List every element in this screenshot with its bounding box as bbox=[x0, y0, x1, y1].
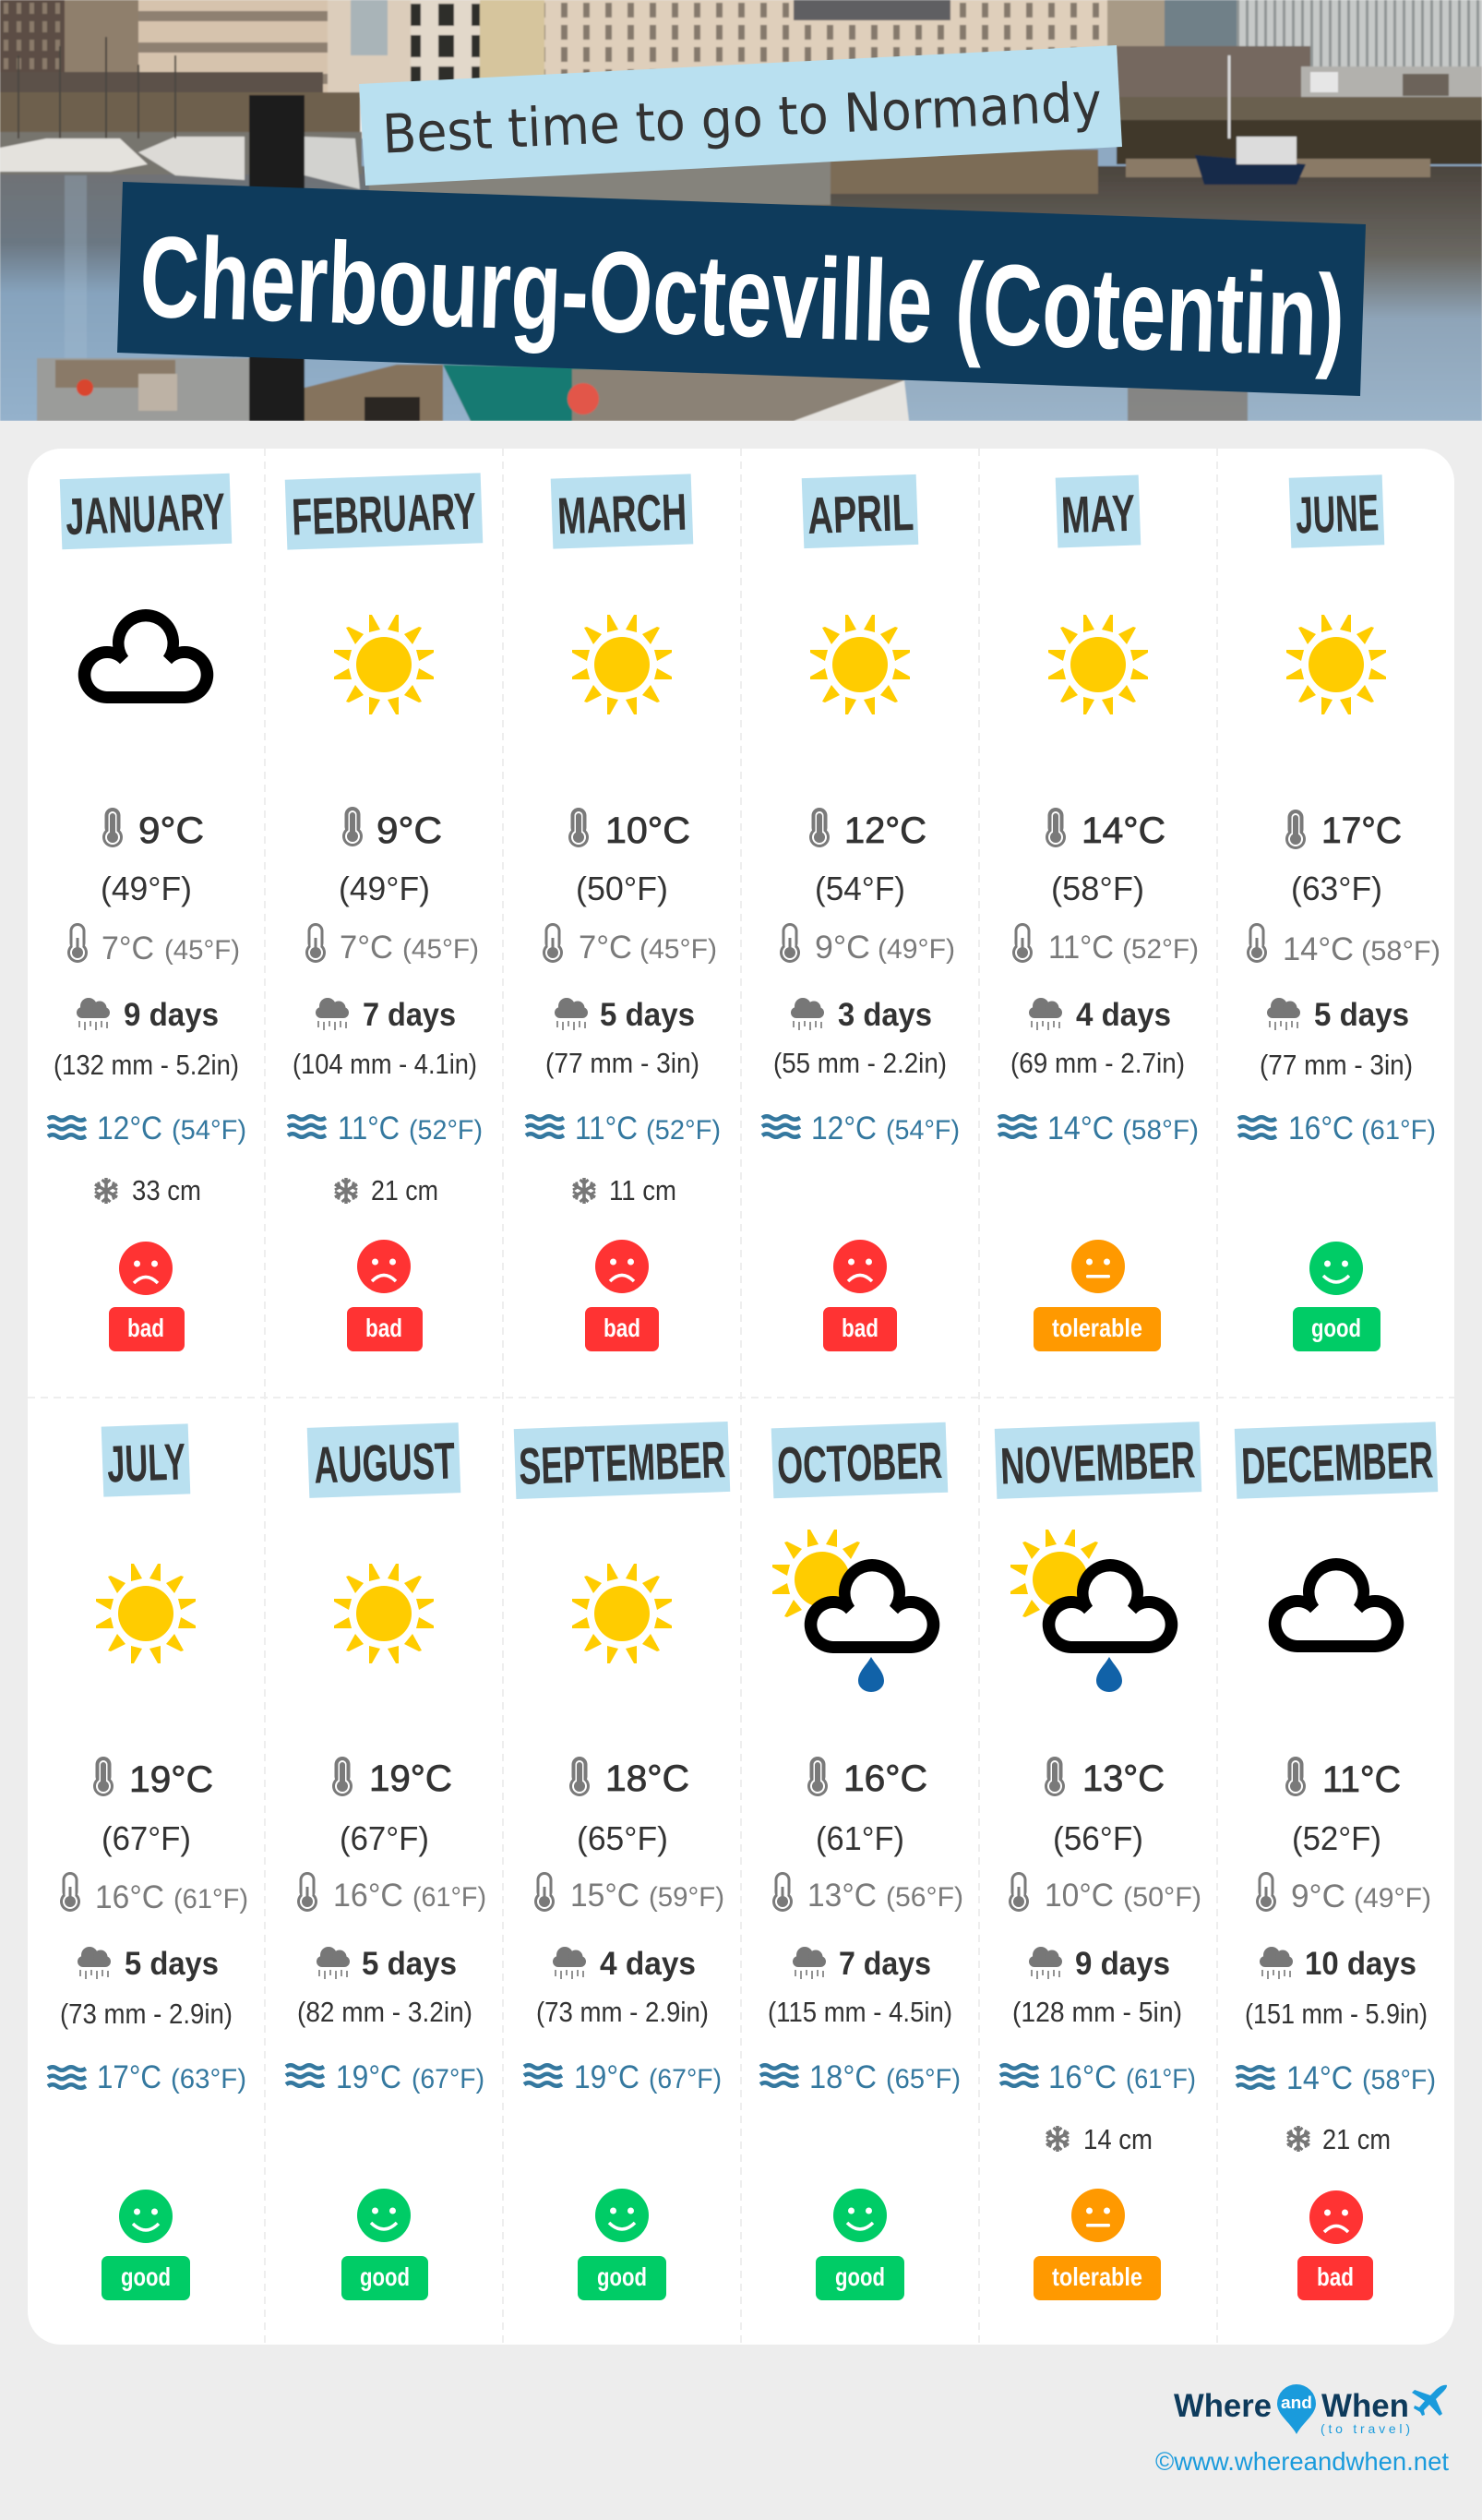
month label: JULY bbox=[106, 1433, 186, 1493]
month: January bbox=[48, 474, 246, 1351]
logo: Where and When (to travel): When bbox=[1321, 2388, 1409, 2424]
icon: cloud bbox=[78, 609, 213, 703]
rating badge bbox=[102, 2256, 190, 2300]
sea temperature C: 12°C bbox=[97, 1110, 162, 1146]
icon: thermometer low bbox=[67, 923, 88, 963]
sea temperature F: (58°F) bbox=[1122, 1115, 1199, 1146]
icon: sun bbox=[1048, 615, 1148, 714]
rainfall: (55 mm - 2.2in) bbox=[773, 1047, 947, 1079]
icon: sea waves bbox=[48, 1117, 86, 1138]
low temperature C: 16°C bbox=[95, 1879, 164, 1915]
month: February bbox=[285, 473, 483, 1351]
icon: sun bbox=[334, 615, 434, 714]
sea temperature F: (52°F) bbox=[409, 1115, 483, 1146]
icon: thermometer high bbox=[332, 1757, 353, 1796]
icon: sad face bbox=[119, 1242, 173, 1295]
rainfall: (77 mm - 3in) bbox=[1260, 1049, 1413, 1081]
month label: MARCH bbox=[556, 483, 687, 545]
icon: sun behind cloud with rain drop bbox=[772, 1530, 939, 1692]
rainy days: 10 days bbox=[1305, 1946, 1416, 1982]
icon: sun bbox=[334, 1564, 434, 1663]
sea temperature C: 18°C bbox=[809, 2059, 877, 2095]
month: July bbox=[48, 1423, 248, 2300]
high temperature F: (58°F) bbox=[1051, 870, 1144, 907]
rainy days: 4 days bbox=[1076, 997, 1171, 1033]
rainfall: (82 mm - 3.2in) bbox=[297, 1996, 472, 2028]
high temperature C: 19°C bbox=[129, 1759, 213, 1800]
rainfall: (104 mm - 4.1in) bbox=[293, 1048, 477, 1080]
icon: sea waves bbox=[524, 2065, 562, 2086]
month label bbox=[1289, 474, 1384, 548]
month label bbox=[802, 474, 918, 548]
low temperature F: (45°F) bbox=[639, 934, 717, 965]
low temperature C: 11°C bbox=[1048, 930, 1114, 966]
month label: MAY bbox=[1060, 484, 1136, 544]
low temperature C: 10°C bbox=[1045, 1878, 1114, 1914]
rating badge bbox=[347, 1307, 423, 1351]
icon: sea waves bbox=[48, 2067, 86, 2088]
icon: thermometer low bbox=[305, 923, 326, 963]
rating badge: bad bbox=[127, 1314, 164, 1342]
low temperature F: (56°F) bbox=[886, 1882, 963, 1913]
high temperature F: (67°F) bbox=[340, 1819, 429, 1857]
icon: neutral face bbox=[1071, 2189, 1125, 2242]
rating badge: tolerable bbox=[1052, 1314, 1142, 1342]
sea temperature C: 19°C bbox=[574, 2059, 639, 2095]
header photo: Cherbourg harbour bbox=[0, 0, 1482, 421]
icon: snowflake bbox=[335, 1178, 357, 1204]
low temperature C: 13°C bbox=[807, 1878, 877, 1914]
icon: thermometer low bbox=[1247, 923, 1267, 963]
rating badge bbox=[823, 1307, 897, 1351]
icon: rain bbox=[793, 1947, 826, 1979]
icon: thermometer high bbox=[568, 808, 589, 847]
icon: sun bbox=[572, 1564, 672, 1663]
icon: rain bbox=[1029, 998, 1062, 1030]
icon: rain bbox=[78, 1947, 111, 1979]
high temperature C: 11°C bbox=[1322, 1759, 1401, 1800]
rainy days: 5 days bbox=[1314, 997, 1409, 1033]
low temperature C: 14°C bbox=[1283, 931, 1354, 967]
high temperature C: 10°C bbox=[605, 810, 690, 851]
sea temperature F: (63°F) bbox=[171, 2064, 246, 2094]
snowfall: 33 cm bbox=[132, 1174, 201, 1206]
high temperature C: 14°C bbox=[1082, 810, 1165, 851]
rating badge bbox=[1034, 1307, 1161, 1351]
icon: thermometer low bbox=[534, 1872, 555, 1912]
low temperature F: (49°F) bbox=[878, 934, 955, 965]
sea temperature C: 11°C bbox=[575, 1110, 638, 1146]
low temperature F: (45°F) bbox=[164, 935, 240, 966]
icon: rain bbox=[1029, 1947, 1062, 1979]
month label bbox=[995, 1422, 1201, 1499]
sea temperature C: 14°C bbox=[1286, 2060, 1353, 2096]
low temperature F: (61°F) bbox=[173, 1884, 248, 1914]
icon: thermometer high bbox=[102, 808, 123, 847]
rainfall: (115 mm - 4.5in) bbox=[768, 1996, 952, 2028]
sea temperature F: (58°F) bbox=[1362, 2065, 1436, 2095]
icon: thermometer low bbox=[60, 1872, 80, 1912]
low temperature F: (58°F) bbox=[1361, 936, 1440, 966]
icon: thermometer low bbox=[772, 1872, 793, 1912]
month label: JUNE bbox=[1295, 483, 1380, 545]
icon: sea waves bbox=[1238, 1117, 1276, 1138]
rating badge: bad bbox=[1317, 2262, 1354, 2291]
rating badge: good bbox=[121, 2262, 171, 2291]
icon: sea waves bbox=[526, 1116, 564, 1137]
month: October bbox=[760, 1422, 963, 2300]
sea temperature F: (67°F) bbox=[412, 2064, 484, 2094]
month label: AUGUST bbox=[313, 1431, 456, 1494]
sea temperature C: 16°C bbox=[1288, 1110, 1354, 1146]
rating badge: bad bbox=[842, 1314, 878, 1342]
rating badge bbox=[109, 1307, 185, 1351]
icon: thermometer high bbox=[1285, 810, 1306, 849]
icon: sea waves bbox=[760, 2065, 798, 2086]
high temperature F: (50°F) bbox=[576, 870, 668, 907]
snowfall: 11 cm bbox=[609, 1174, 676, 1206]
icon: happy face bbox=[833, 2189, 887, 2242]
icon: sun behind cloud with rain drop bbox=[1010, 1530, 1177, 1692]
banner: subtitle: Best time to go to Normandy bbox=[381, 70, 1103, 166]
low temperature C: 15°C bbox=[570, 1878, 639, 1914]
rainfall: (151 mm - 5.9in) bbox=[1245, 1998, 1428, 2030]
icon: rain bbox=[1267, 998, 1300, 1030]
icon: sad face bbox=[595, 1240, 649, 1293]
low temperature F: (49°F) bbox=[1354, 1883, 1431, 1914]
month label: APRIL bbox=[807, 483, 914, 545]
rainfall: (77 mm - 3in) bbox=[545, 1047, 699, 1079]
copyright url: ©www.whereandwhen.net bbox=[1155, 2447, 1449, 2476]
high temperature F: (49°F) bbox=[339, 870, 430, 907]
icon: happy face bbox=[1309, 1242, 1363, 1295]
icon: sea waves bbox=[288, 1116, 326, 1137]
icon: sad face bbox=[833, 1240, 887, 1293]
logo: Where and When (to travel): (to travel) bbox=[1321, 2421, 1410, 2436]
sea temperature F: (61°F) bbox=[1361, 1115, 1436, 1146]
month label: OCTOBER bbox=[776, 1431, 943, 1494]
icon: thermometer high bbox=[807, 1757, 828, 1796]
high temperature F: (49°F) bbox=[101, 870, 192, 907]
icon: rain bbox=[77, 998, 110, 1030]
banner: subtitle bbox=[359, 45, 1122, 186]
month: March bbox=[526, 474, 721, 1351]
low temperature C: 7°C bbox=[340, 930, 393, 966]
month label bbox=[285, 473, 483, 550]
icon: rain bbox=[316, 998, 349, 1030]
rainfall: (73 mm - 2.9in) bbox=[60, 1998, 233, 2030]
high temperature C: 17°C bbox=[1321, 810, 1402, 851]
icon: happy face bbox=[595, 2189, 649, 2242]
low temperature C: 9°C bbox=[815, 930, 870, 966]
icon: snowflake bbox=[573, 1178, 595, 1204]
low temperature F: (52°F) bbox=[1122, 934, 1199, 965]
month label bbox=[102, 1423, 190, 1497]
high temperature F: (67°F) bbox=[102, 1819, 191, 1857]
icon: rain bbox=[791, 998, 824, 1030]
sea temperature F: (61°F) bbox=[1126, 2064, 1196, 2094]
month label: FEBRUARY bbox=[291, 482, 477, 546]
high temperature F: (61°F) bbox=[816, 1819, 904, 1857]
icon: rain bbox=[553, 1947, 586, 1979]
sea temperature F: (54°F) bbox=[172, 1115, 246, 1146]
rainy days: 3 days bbox=[838, 997, 932, 1033]
icon: snowflake bbox=[1287, 2126, 1309, 2152]
rainy days: 5 days bbox=[125, 1946, 219, 1982]
rating badge: good bbox=[1311, 1314, 1361, 1342]
rating badge bbox=[1297, 2256, 1373, 2300]
low temperature C: 7°C bbox=[102, 930, 154, 966]
month label bbox=[771, 1422, 948, 1498]
rating badge bbox=[341, 2256, 428, 2300]
month: August bbox=[286, 1422, 486, 2300]
icon: sea waves bbox=[1000, 2065, 1038, 2086]
icon: happy face bbox=[119, 2190, 173, 2243]
low temperature C: 9°C bbox=[1291, 1878, 1345, 1914]
snowfall: 21 cm bbox=[1322, 2123, 1391, 2155]
snowfall: 14 cm bbox=[1083, 2123, 1153, 2155]
low temperature F: (45°F) bbox=[402, 934, 479, 965]
high temperature F: (54°F) bbox=[815, 870, 905, 907]
icon: neutral face bbox=[1071, 1240, 1125, 1293]
high temperature C: 18°C bbox=[605, 1758, 689, 1799]
sea temperature C: 17°C bbox=[97, 2059, 161, 2095]
rainfall: (73 mm - 2.9in) bbox=[536, 1996, 709, 2028]
icon: rain bbox=[1260, 1947, 1293, 1979]
rating badge bbox=[816, 2256, 904, 2300]
month label: JANUARY bbox=[65, 482, 226, 546]
icon: thermometer high bbox=[1045, 1757, 1065, 1796]
sea temperature C: 11°C bbox=[338, 1110, 400, 1146]
logo: Where and When (to travel) bbox=[1174, 2384, 1447, 2436]
icon: sea waves bbox=[286, 2065, 324, 2086]
month label bbox=[551, 474, 693, 549]
icon: sun bbox=[810, 615, 910, 714]
icon: sea waves bbox=[1237, 2067, 1274, 2088]
icon: sad face bbox=[357, 1240, 411, 1293]
rainy days: 4 days bbox=[600, 1946, 696, 1982]
rainfall: (69 mm - 2.7in) bbox=[1010, 1047, 1185, 1079]
icon: thermometer high bbox=[809, 808, 830, 847]
rainy days: 9 days bbox=[1075, 1946, 1170, 1982]
month: June bbox=[1238, 474, 1440, 1351]
sea temperature C: 19°C bbox=[336, 2059, 401, 2095]
icon: sea waves bbox=[998, 1116, 1036, 1137]
rainy days: 5 days bbox=[362, 1946, 457, 1982]
icon: cloud bbox=[1269, 1558, 1404, 1652]
high temperature F: (56°F) bbox=[1053, 1819, 1143, 1857]
logo: Where and When (to travel): Where bbox=[1174, 2388, 1272, 2424]
icon: thermometer low bbox=[1256, 1872, 1276, 1912]
month: November bbox=[995, 1422, 1201, 2300]
month label bbox=[514, 1422, 730, 1499]
low temperature F: (50°F) bbox=[1123, 1882, 1201, 1913]
icon: thermometer low bbox=[297, 1872, 317, 1912]
month label bbox=[1056, 474, 1141, 548]
rating badge: tolerable bbox=[1052, 2262, 1142, 2291]
low temperature C: 7°C bbox=[579, 930, 632, 966]
sea temperature C: 12°C bbox=[811, 1110, 877, 1146]
icon: thermometer high bbox=[1285, 1757, 1306, 1796]
high temperature C: 16°C bbox=[843, 1758, 927, 1799]
panel: climate calendar card bbox=[28, 449, 1454, 2345]
logo: Where and When (to travel): and bbox=[1281, 2394, 1312, 2412]
sea temperature C: 14°C bbox=[1047, 1110, 1114, 1146]
low temperature C: 16°C bbox=[333, 1878, 403, 1914]
rating badge: bad bbox=[365, 1314, 402, 1342]
sea temperature F: (65°F) bbox=[886, 2064, 961, 2094]
sea temperature F: (67°F) bbox=[649, 2064, 722, 2094]
icon: snowflake bbox=[1046, 2126, 1069, 2152]
rainy days: 7 days bbox=[363, 997, 456, 1033]
sea temperature C: 16°C bbox=[1048, 2059, 1117, 2095]
month label: NOVEMBER bbox=[999, 1430, 1196, 1495]
icon: sun bbox=[96, 1564, 196, 1663]
sea temperature F: (54°F) bbox=[886, 1115, 960, 1146]
low temperature F: (59°F) bbox=[649, 1882, 724, 1913]
icon: sea waves bbox=[762, 1116, 800, 1137]
snowfall: 21 cm bbox=[371, 1174, 438, 1206]
rating badge bbox=[585, 1307, 659, 1351]
month: September bbox=[514, 1422, 730, 2300]
icon: thermometer low bbox=[543, 923, 563, 963]
rainy days: 7 days bbox=[839, 1946, 931, 1982]
icon: rain bbox=[555, 998, 588, 1030]
icon: snowflake bbox=[95, 1178, 117, 1204]
icon: thermometer high bbox=[342, 807, 363, 846]
icon: thermometer high bbox=[1046, 808, 1066, 847]
high temperature C: 9°C bbox=[138, 810, 204, 851]
icon: rain bbox=[317, 1947, 350, 1979]
high temperature C: 19°C bbox=[369, 1758, 452, 1799]
rating badge bbox=[578, 2256, 666, 2300]
month label bbox=[60, 474, 232, 549]
icon: sad face bbox=[1309, 2190, 1363, 2244]
rainy days: 9 days bbox=[124, 997, 219, 1033]
rainfall: (132 mm - 5.2in) bbox=[54, 1049, 239, 1081]
month: December bbox=[1235, 1422, 1438, 2300]
high temperature C: 13°C bbox=[1082, 1758, 1165, 1799]
rating badge bbox=[1293, 1307, 1380, 1351]
rating badge: bad bbox=[604, 1314, 640, 1342]
high temperature C: 9°C bbox=[376, 810, 442, 851]
rating badge: good bbox=[835, 2262, 885, 2291]
icon: thermometer high bbox=[569, 1757, 590, 1796]
month: May bbox=[998, 474, 1199, 1351]
icon: thermometer low bbox=[1009, 1872, 1029, 1912]
month: April bbox=[762, 474, 960, 1351]
icon: sun bbox=[1286, 615, 1386, 714]
icon: thermometer low bbox=[780, 923, 800, 963]
rating badge: good bbox=[597, 2262, 647, 2291]
rating badge bbox=[1034, 2256, 1161, 2300]
month label bbox=[307, 1422, 460, 1498]
rainy days: 5 days bbox=[600, 997, 695, 1033]
sea temperature F: (52°F) bbox=[646, 1115, 721, 1146]
high temperature F: (65°F) bbox=[577, 1819, 668, 1857]
rating badge: good bbox=[360, 2262, 410, 2291]
icon: thermometer low bbox=[1012, 923, 1033, 963]
icon: happy face bbox=[357, 2189, 411, 2242]
high temperature C: 12°C bbox=[844, 810, 926, 851]
rainfall: (128 mm - 5in) bbox=[1012, 1996, 1182, 2028]
month label: SEPTEMBER bbox=[518, 1430, 726, 1495]
high temperature F: (52°F) bbox=[1292, 1819, 1381, 1857]
icon: sun bbox=[572, 615, 672, 714]
high temperature F: (63°F) bbox=[1291, 870, 1382, 907]
icon: thermometer high bbox=[93, 1757, 114, 1796]
low temperature F: (61°F) bbox=[412, 1882, 486, 1913]
